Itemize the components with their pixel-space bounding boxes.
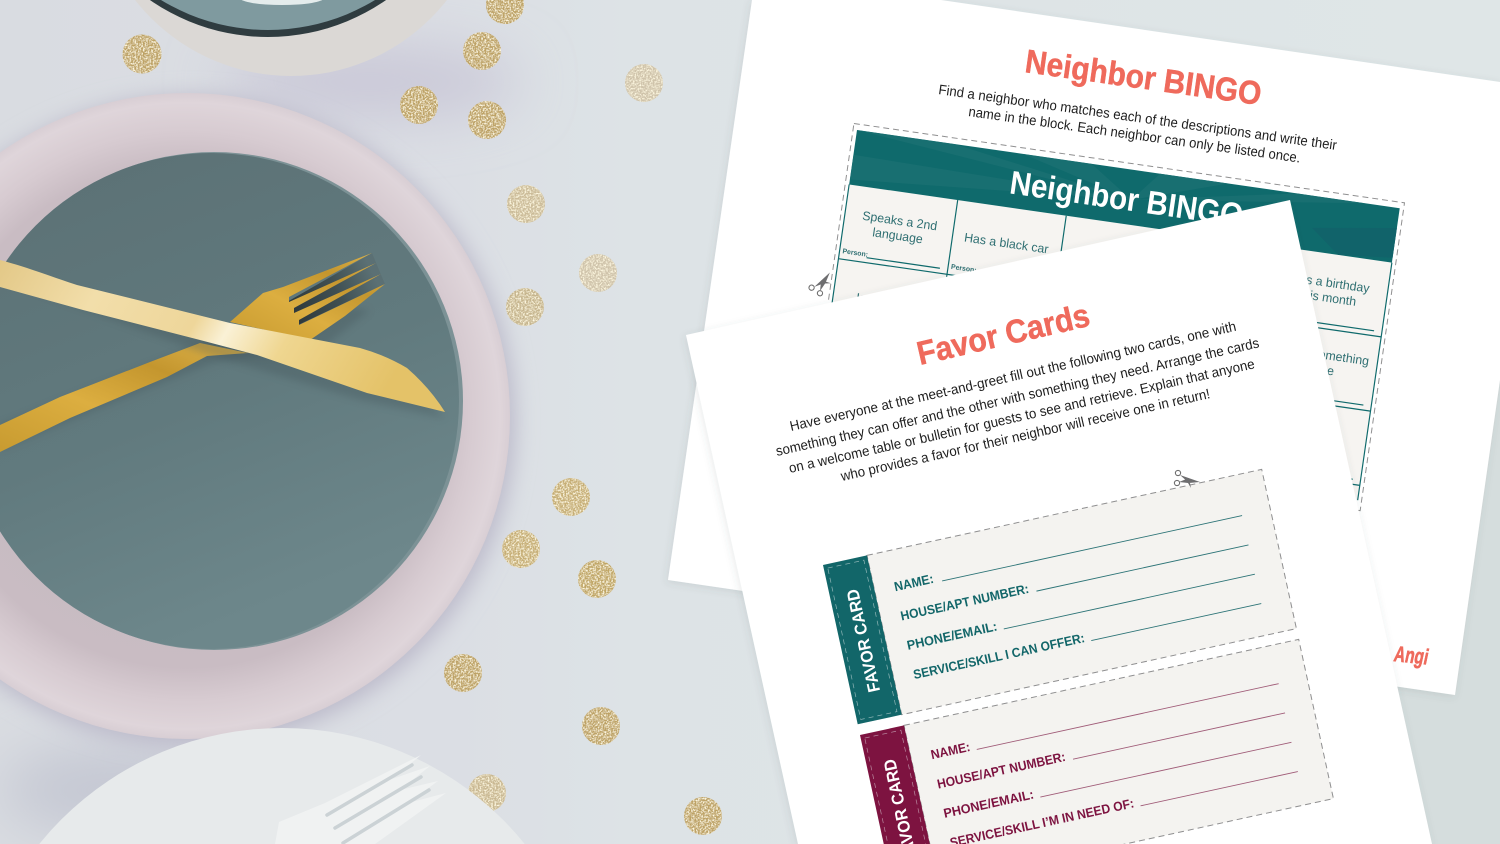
- heading: Favor Cards: Favor Cards: [913, 296, 1093, 372]
- bingo cell text: online: [1300, 360, 1335, 378]
- card tab: [860, 725, 939, 844]
- panel: Favor Cards sheet: [686, 200, 1432, 844]
- text block: favor card instructions: something they can offer and the other with something they need. Arrange the cards: [774, 334, 1261, 459]
- confetti dot behind white plate: [468, 774, 506, 812]
- card fields: HOUSE/APT NUMBER:: [936, 749, 1067, 792]
- maroon favor card: [860, 639, 1333, 844]
- bingo header band: [849, 130, 1400, 263]
- card fields: PHONE/EMAIL:: [905, 619, 999, 653]
- bingo cell text: Speaks a 2nd: [861, 209, 938, 233]
- white plate at bottom: [0, 728, 594, 844]
- heading: Neighbor BINGO: Neighbor BINGO: [1023, 42, 1264, 112]
- large pink plate: [0, 93, 515, 746]
- card tab: [823, 555, 902, 724]
- bingo card: [810, 123, 1405, 511]
- bingo cell text: this month: [1299, 287, 1357, 309]
- bingo cell text: Can juggle: [1086, 248, 1146, 270]
- bingo grid lines: [815, 184, 1392, 500]
- bingo cell text: [825, 207, 1380, 452]
- icon: scissors on favor card: [1174, 470, 1200, 488]
- text block: bingo instructions: Find a neighbor who matches each of the descriptions and write their: [938, 81, 1338, 153]
- logo: Angi: Angi: [1392, 641, 1431, 669]
- text block: favor card instructions: Have everyone at the meet-and-greet fill out the following two cards, one with: [788, 318, 1237, 434]
- icon: scissors on bingo card: [808, 267, 835, 298]
- card fields: NAME:: [929, 739, 972, 762]
- confetti dots: [122, 0, 722, 835]
- icon: white fork: [275, 755, 446, 844]
- bingo cell text: Has a black car: [963, 230, 1049, 256]
- bowl stack at top: [61, 0, 489, 76]
- bingo cell text: language: [872, 225, 924, 246]
- teal favor card: [823, 469, 1296, 724]
- teal plate: [0, 152, 463, 650]
- bingo cell text: Is a dad: [1285, 428, 1330, 449]
- bingo cell text: Person:: [951, 264, 977, 274]
- icon: gold fork: [0, 253, 385, 452]
- card fields: SERVICE/SKILL I CAN OFFER:: [912, 630, 1086, 682]
- card fields: PHONE/EMAIL:: [942, 787, 1035, 821]
- card fields: HOUSE/APT NUMBER:: [899, 581, 1030, 623]
- text block: favor card instructions: who provides a favor for their neighbor will receive one in return!: [838, 385, 1211, 484]
- bingo cell text: Is a teacher: [855, 291, 921, 314]
- bingo header band: Neighbor BINGO: [1008, 163, 1246, 234]
- icon: gold knife: [0, 260, 445, 418]
- card fields: [929, 672, 1298, 844]
- bingo cell text: Bought something: [1270, 340, 1370, 368]
- bingo cell text: Has a birthday: [1290, 270, 1371, 296]
- bingo cell text: Person:: [842, 248, 868, 259]
- card tab: FAVOR CARD: [843, 587, 884, 694]
- text block: favor card instructions: on a welcome table or bulletin for guests to see and retrieve. Explain that anyone: [787, 355, 1256, 476]
- card fields: NAME:: [893, 571, 935, 594]
- text block: bingo instructions: name in the block. Each neighbor can only be listed once.: [968, 103, 1302, 166]
- panel: Neighbor BINGO sheet: [668, 0, 1500, 695]
- card fields: [893, 504, 1262, 682]
